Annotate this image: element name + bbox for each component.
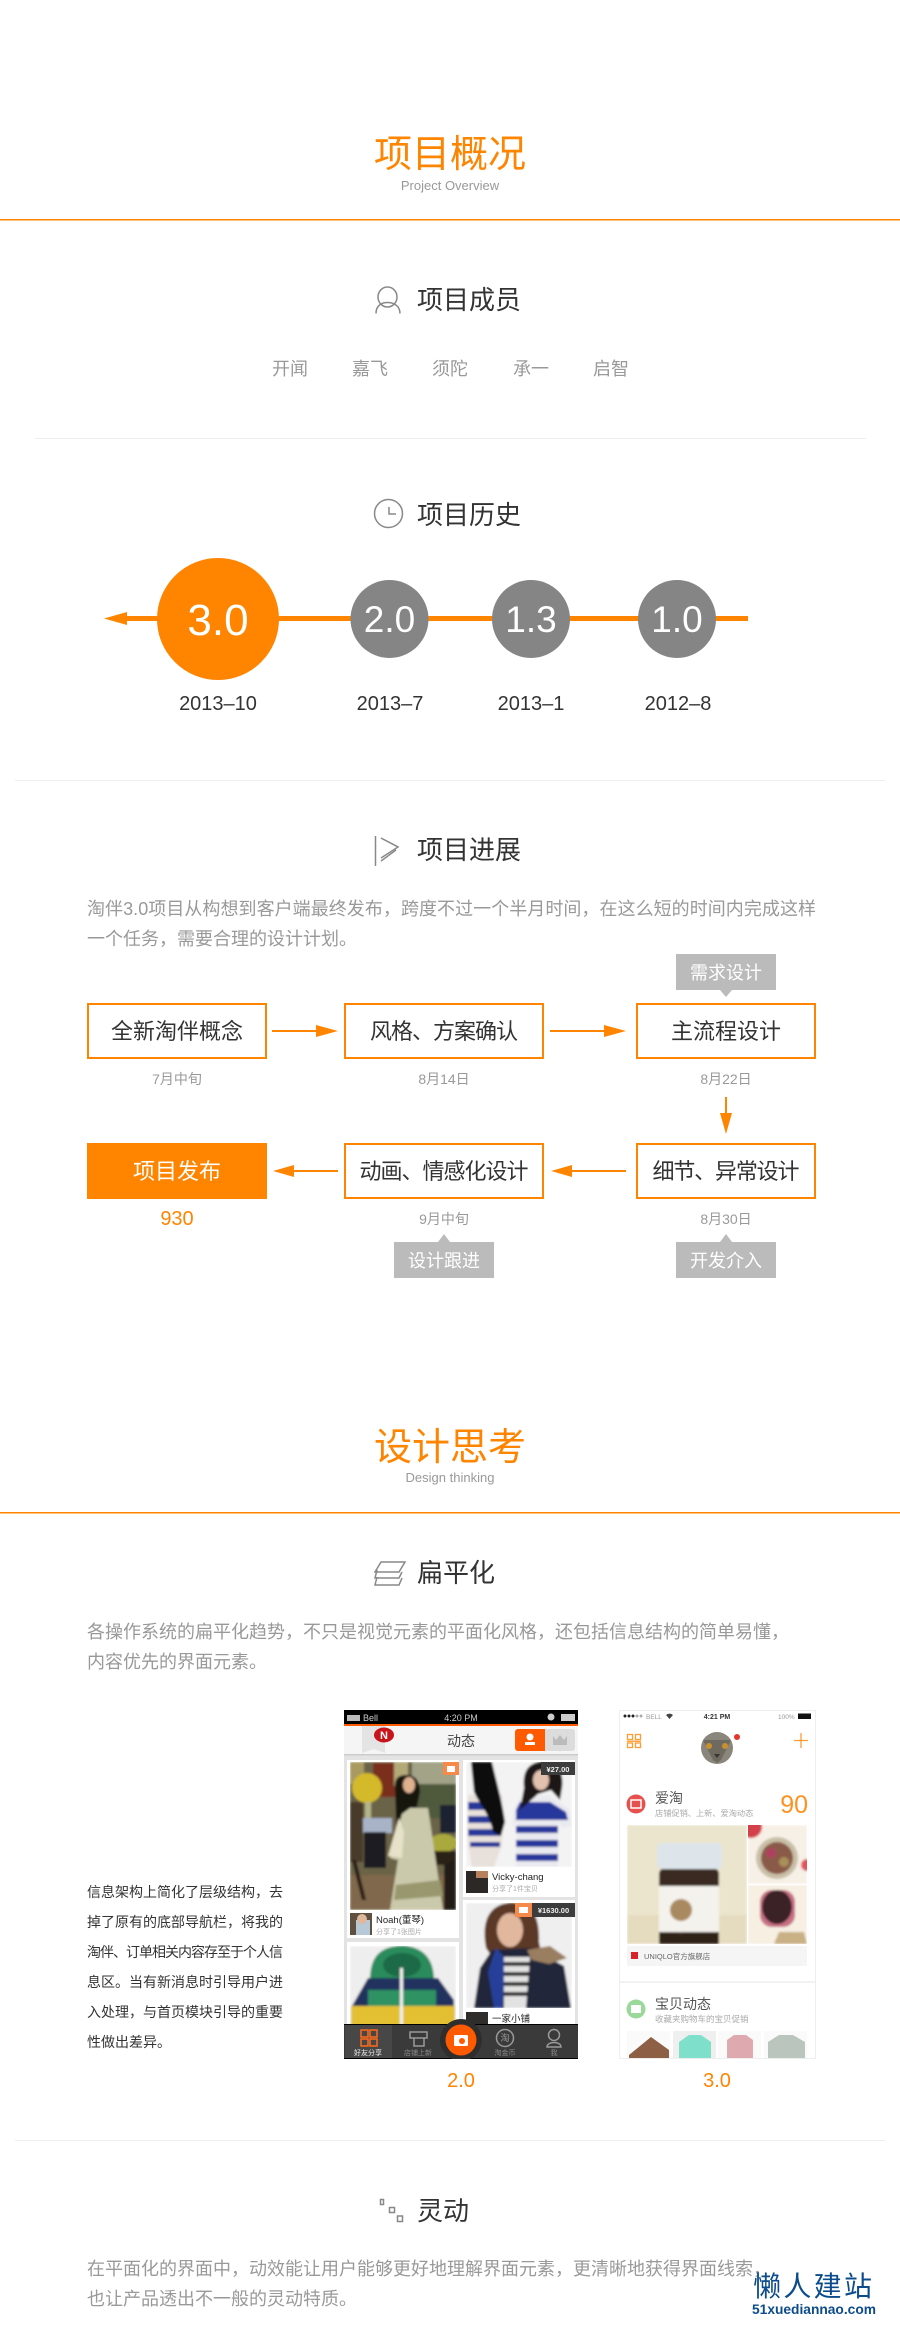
status bar [344, 1710, 578, 1726]
heading: flat design: 扁平化 [417, 1558, 495, 1588]
timeline chart: 2013–10 [179, 693, 257, 715]
section heading: design thinking: 设计思考 [374, 1427, 526, 1469]
timeline chart: 2.0 [364, 599, 415, 640]
status bar: BELL [646, 1714, 662, 1721]
card: down jacket photo: ¥1630.00 [538, 1906, 569, 1915]
callout: requirements design [676, 954, 776, 997]
arrow [272, 1025, 338, 1037]
feed: item updates [626, 1996, 807, 2061]
flat design paragraph: 内容优先的界面元素。 [87, 1652, 267, 1672]
card: striped shirt photo: ¥27.00 [547, 1765, 569, 1774]
bottom tab bar: 我 [550, 2048, 558, 2057]
icon: scattered squares [380, 2200, 402, 2222]
icon: clock [374, 500, 402, 528]
icon: progress chevrons [376, 836, 398, 866]
section heading: project overview: 项目概况 [374, 134, 526, 176]
callout: requirements design: 需求设计 [690, 963, 762, 983]
heading: project members: 项目成员 [417, 285, 521, 315]
timeline chart: 1.3 [505, 599, 557, 640]
callout: design follow-up [394, 1234, 494, 1278]
panel: lively motion [87, 2196, 771, 2309]
step: detail design: 8月30日 [700, 1211, 752, 1227]
section heading: design thinking: Design thinking [406, 1470, 494, 1485]
side note text: 信息架构上简化了层级结构，去 [87, 1884, 283, 1900]
card: striped shirt photo [463, 1760, 575, 1897]
step: animation design: 9月中旬 [419, 1211, 469, 1227]
card: dress photo [347, 1760, 459, 1938]
icon: plus [794, 1733, 808, 1748]
bottom tab bar: 好友分享 [354, 2048, 382, 2057]
side note text: 息区。当有新消息时引导用户进 [87, 1974, 283, 1990]
nav bar: N [380, 1730, 388, 1742]
timeline chart: 3.0 [187, 596, 249, 645]
feed: item updates: 收藏夹购物车的宝贝促销 [655, 2014, 749, 2024]
status bar: 4:21 PM [704, 1714, 730, 1721]
flat design paragraph: 各操作系统的扁平化趋势，不只是视觉元素的平面化风格，还包括信息结构的简单易懂， [87, 1622, 789, 1642]
timeline chart [104, 558, 748, 715]
section heading: design thinking [0, 1427, 900, 1514]
panel: project progress [87, 835, 816, 1278]
app screenshot: version 3.0 [619, 1710, 816, 2059]
store bar: UNIQLO官方旗舰店 [644, 1951, 711, 1961]
section heading: project overview [0, 134, 900, 220]
panel: flat design [87, 1558, 816, 2092]
callout: development: 开发介入 [690, 1251, 762, 1271]
intro paragraph: 淘伴3.0项目从构想到客户端最终发布，跨度不过一个半月时间，在这么短的时间内完成这样 [87, 899, 816, 919]
feed: aitao: 90 [780, 1791, 808, 1819]
step: style confirmation [345, 1004, 543, 1087]
nav bar: 动态 [447, 1733, 475, 1749]
card: striped shirt photo: 分享了1件宝贝 [492, 1884, 538, 1893]
heading: project history: 项目历史 [417, 500, 521, 530]
member names: 嘉飞 [352, 359, 388, 379]
section heading: project overview: Project Overview [401, 178, 500, 193]
photo: petals [748, 1825, 807, 1884]
panel: project members [272, 285, 629, 379]
watermark: 懒人建站 [753, 2271, 872, 2302]
step: style confirmation: 风格、方案确认 [370, 1019, 518, 1044]
member names: 开闻 [272, 359, 308, 379]
arrow [273, 1165, 338, 1177]
side note text: 掉了原有的底部导航栏，将我的 [87, 1914, 283, 1930]
bottom tab bar: 店铺上新 [404, 2048, 432, 2057]
step: animation design [345, 1144, 543, 1227]
heading: project progress: 项目进展 [417, 835, 521, 865]
avatar: cat [701, 1732, 740, 1764]
panel: project history [104, 500, 748, 715]
card: striped shirt photo: Vicky-chang [492, 1872, 544, 1883]
bottom tab bar: 淘 [500, 2032, 510, 2043]
step: publish [87, 1143, 267, 1230]
photo: jar [627, 1825, 747, 1944]
status bar: Bell [363, 1713, 378, 1723]
label: 2.0: 2.0 [447, 2070, 475, 2092]
member names: 承一 [513, 359, 549, 379]
side note text: 入处理，与首页模块引导的重要 [87, 2004, 283, 2020]
step: publish: 930 [160, 1208, 194, 1230]
step: publish: 项目发布 [133, 1159, 221, 1184]
feed: item updates: 宝贝动态 [655, 1996, 711, 2012]
intro paragraph [87, 899, 816, 949]
member names: 启智 [593, 359, 629, 379]
step: detail design: 细节、异常设计 [652, 1159, 800, 1184]
watermark: 51xuediannao.com [752, 2301, 876, 2317]
callout: development [676, 1234, 776, 1278]
card: dress photo: 分享了1张图片 [376, 1927, 422, 1936]
step: main flow design [637, 1004, 815, 1087]
member names: 须陀 [432, 359, 468, 379]
bottom tab bar: 淘金币 [494, 2048, 516, 2057]
status bar: 4:20 PM [444, 1713, 478, 1723]
side note text: 性做出差异。 [87, 2034, 171, 2050]
app screenshot: version 2.0 [344, 1710, 578, 2059]
card: down jacket photo: 一家小铺 [492, 2013, 530, 2025]
icon: person [376, 287, 400, 314]
timeline chart: 1.0 [651, 599, 703, 640]
motion paragraph [87, 2259, 771, 2309]
step: animation design: 动画、情感化设计 [360, 1159, 528, 1184]
arrow [550, 1025, 626, 1037]
step: style confirmation: 8月14日 [418, 1071, 470, 1087]
card: down jacket photo [463, 1900, 575, 2030]
step: new concept: 7月中旬 [152, 1071, 202, 1087]
motion paragraph: 在平面化的界面中，动效能让用户能够更好地理解界面元素，更清晰地获得界面线索， [87, 2259, 771, 2279]
feed: aitao: 店铺促销、上新、爱淘动态 [655, 1808, 753, 1818]
feed: aitao [626, 1790, 813, 1966]
member names [272, 359, 629, 379]
heading: lively motion: 灵动 [417, 2196, 469, 2226]
step: main flow design: 8月22日 [700, 1071, 752, 1087]
timeline chart: 2012–8 [645, 693, 711, 715]
step: main flow design: 主流程设计 [671, 1019, 781, 1044]
step: new concept: 全新淘伴概念 [111, 1019, 243, 1044]
motion paragraph: 也让产品透出不一般的灵动特质。 [87, 2289, 357, 2309]
card: dress photo: Noah(董琴) [376, 1914, 424, 1926]
arrow down [720, 1097, 732, 1134]
callout: design follow-up: 设计跟进 [408, 1251, 480, 1271]
side note text: 淘伴、订单相关内容存至于个人信 [87, 1944, 283, 1960]
nav bar [344, 1726, 578, 1756]
bottom tab bar [344, 2019, 578, 2061]
arrow [551, 1165, 626, 1177]
status bar [624, 1714, 811, 1721]
icon: qr code [627, 1734, 641, 1748]
icon: layers [375, 1562, 405, 1585]
card: jacket photo [347, 1942, 459, 2032]
step: new concept [88, 1004, 266, 1087]
timeline chart: 2013–1 [498, 693, 564, 715]
watermark [752, 2271, 876, 2317]
store bar [627, 1946, 807, 1966]
photo: jam jar [748, 1885, 807, 1944]
timeline chart: 2013–7 [357, 693, 423, 715]
step: detail design [637, 1144, 815, 1227]
flat design paragraph [87, 1622, 789, 1672]
intro paragraph: 一个任务，需要合理的设计计划。 [87, 929, 357, 949]
status bar: 100% [778, 1714, 795, 1721]
side note text [87, 1884, 283, 2050]
label: 3.0: 3.0 [703, 2070, 731, 2092]
feed: aitao: 爱淘 [655, 1790, 683, 1806]
